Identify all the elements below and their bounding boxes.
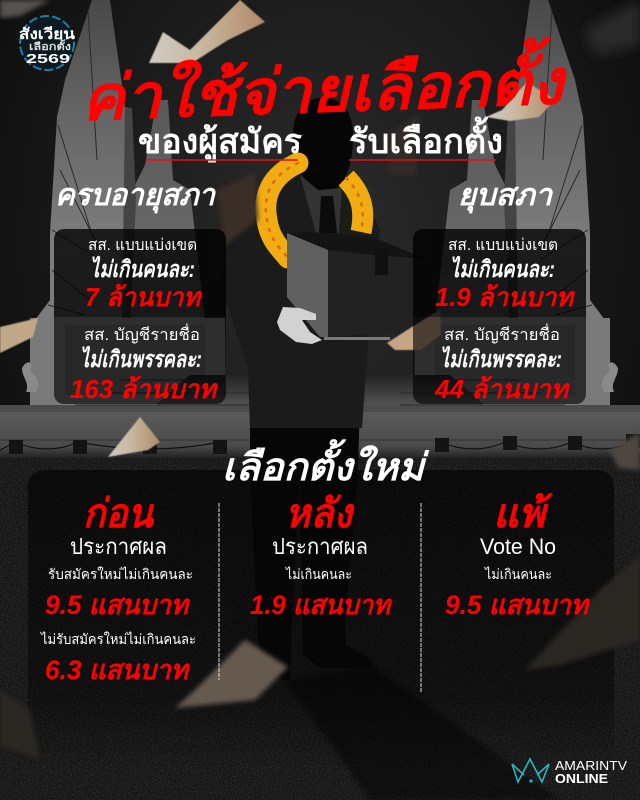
blurred notes: [175, 640, 288, 708]
plaza band with chain fence: [0, 412, 640, 458]
shirt and tie: [300, 175, 342, 233]
party list limit: สส. บัญชีรายชื่อ: [444, 323, 560, 344]
brand logo: ONLINE: [555, 771, 608, 786]
gloved hand: [277, 307, 322, 344]
note top: [149, 0, 265, 63]
column: before results: ไม่รับสมัครใหม่ไม่เกินคนละ: [40, 631, 196, 647]
man's shadow: [285, 665, 560, 800]
panel background: [54, 229, 226, 404]
panel background: [413, 229, 586, 404]
note on plaza: [108, 417, 160, 457]
column: before results: 6.3 แสนบาท: [45, 655, 190, 685]
column: before results: 9.5 แสนบาท: [45, 590, 190, 620]
heading: ยุบสภา: [458, 179, 553, 214]
subtitle: รับเลือกตั้ง: [349, 116, 503, 161]
column: before results: ก่อน: [83, 492, 155, 536]
monument: left wing: [22, 0, 226, 410]
ballot box: [287, 232, 428, 340]
constituency limit: 7 ล้านบาท: [85, 282, 203, 312]
column: after results: 1.9 แสนบาท: [250, 590, 392, 620]
panel: term ends: [54, 179, 226, 404]
monument: right wing: [414, 0, 618, 410]
column: lost to vote no: แพ้: [493, 492, 553, 536]
new election heading: เลือกตั้งใหม่: [222, 439, 429, 489]
constituency limit: สส. แบบแบ่งเขต: [88, 237, 197, 254]
column: before results: รับสมัครใหม่ไม่เกินคนละ: [48, 566, 193, 582]
party list limit: 163 ล้านบาท: [70, 374, 219, 404]
legs: [250, 400, 372, 680]
constituency limit: ไม่เกินคนละ:: [450, 255, 555, 282]
party list limit: ไม่เกินพรรคละ:: [440, 345, 562, 372]
head: [293, 98, 353, 190]
party list limit: [70, 323, 219, 404]
party list limit: 44 ล้านบาท: [434, 374, 571, 404]
man silhouette: [219, 98, 380, 680]
column: after results: [250, 492, 392, 620]
brand logo: [512, 758, 627, 786]
constituency limit: 1.9 ล้านบาท: [435, 282, 576, 312]
badge logo: 2569: [26, 51, 70, 66]
jacket: [219, 172, 380, 428]
column: after results: หลัง: [285, 492, 355, 536]
constituency limit: สส. แบบแบ่งเขต: [448, 237, 558, 254]
column: lost to vote no: Vote No: [480, 534, 556, 559]
note right: [486, 82, 555, 121]
subtitle: ของผู้สมัคร: [138, 123, 303, 163]
badge logo: เลือกตั้ง: [29, 39, 71, 53]
subtitle: [138, 116, 503, 163]
column: lost to vote no: ไม่เกินคนละ: [484, 566, 552, 582]
column: after results: ไม่เกินคนละ: [285, 566, 352, 582]
asphalt ground: [0, 458, 640, 800]
constituency limit: [435, 237, 576, 312]
brand logo: AMARINTV: [555, 758, 627, 773]
badge logo: [19, 16, 76, 70]
panel: new election background: [28, 470, 614, 770]
constituency limit: [85, 237, 203, 312]
garland: [266, 163, 363, 258]
column: before results: ประกาศผล: [70, 534, 167, 559]
dividers: [219, 503, 421, 693]
heading: ครบอายุสภา: [55, 179, 216, 214]
panel: dissolution: [413, 179, 586, 404]
badge logo: สังเวียน: [19, 26, 76, 43]
party list limit: สส. บัญชีรายชื่อ: [84, 323, 200, 344]
column: lost to vote no: 9.5 แสนบาท: [445, 590, 590, 620]
constituency limit: ไม่เกินคนละ:: [90, 255, 195, 282]
monument steps: [0, 375, 640, 416]
note left: [0, 318, 38, 353]
column: lost to vote no: [445, 492, 590, 620]
title: ค่าใช้จ่ายเลือกตั้ง: [80, 36, 569, 134]
note by hand: [387, 310, 441, 350]
party list limit: [434, 323, 571, 404]
column: after results: ประกาศผล: [272, 534, 368, 559]
column: before results: [40, 492, 196, 685]
party list limit: ไม่เกินพรรคละ:: [80, 345, 202, 372]
